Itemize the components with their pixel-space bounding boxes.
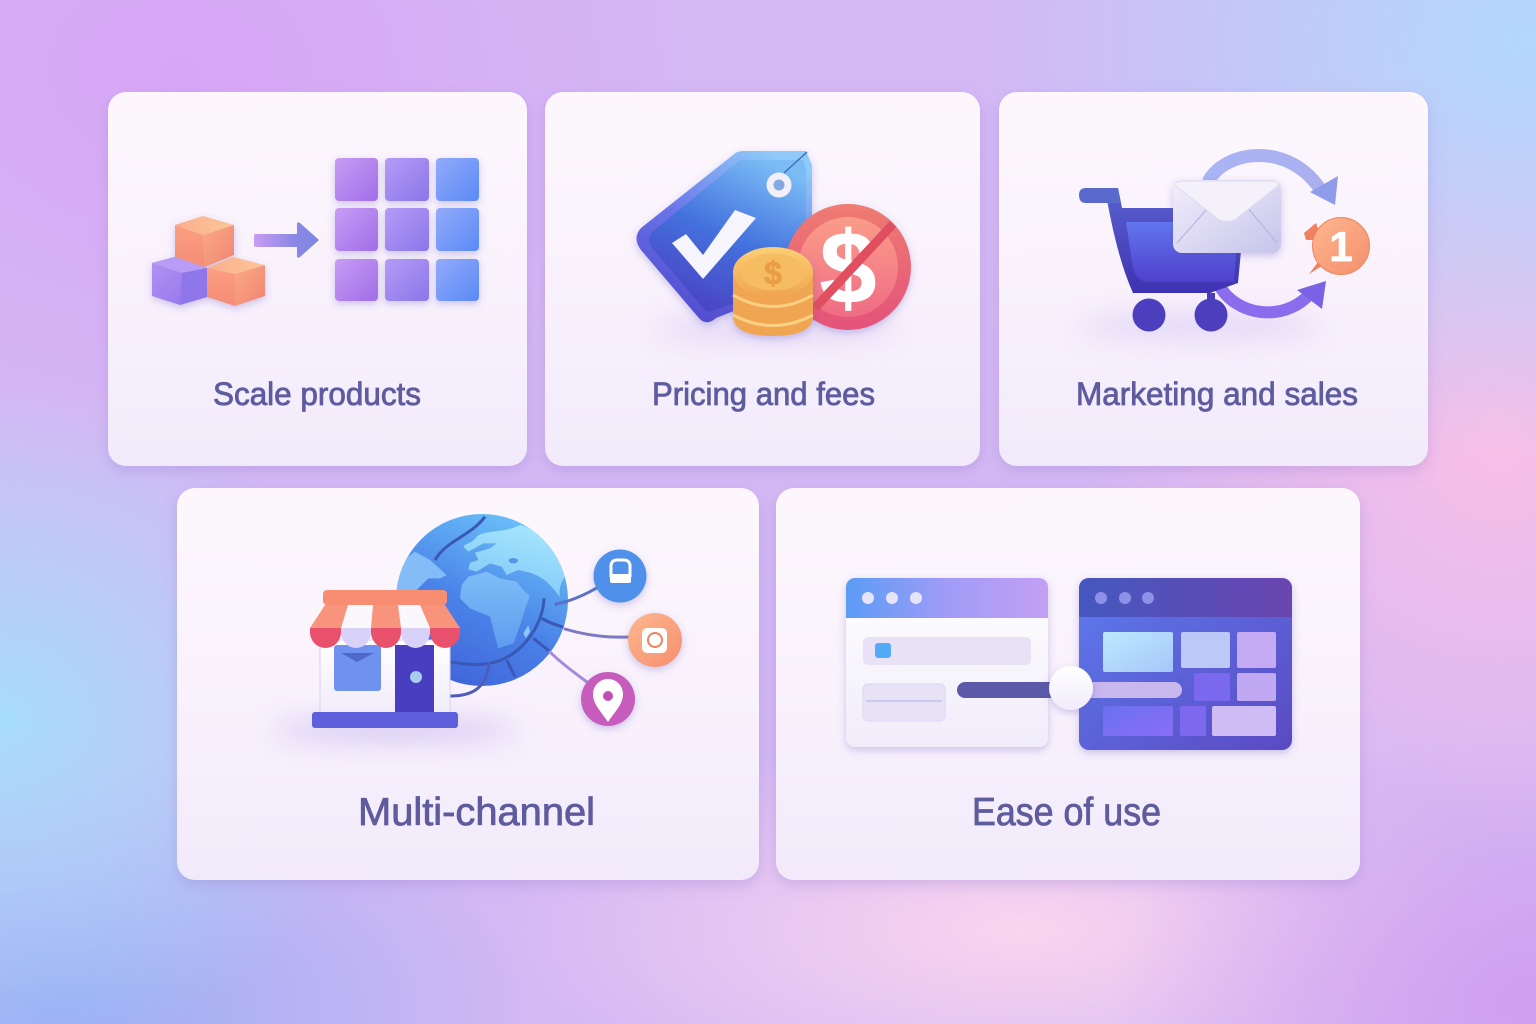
panel: Scale products bbox=[108, 92, 527, 466]
icon: envelope bbox=[1173, 180, 1281, 253]
arrow: top arc bbox=[1208, 156, 1338, 205]
icon: cubes bbox=[152, 216, 265, 306]
icon: notification badge bbox=[1304, 218, 1370, 274]
icon: storefront bbox=[310, 590, 460, 728]
icon: price tag bbox=[636, 151, 812, 322]
icon: crossed-out dollar: $ bbox=[820, 211, 876, 325]
icon: lock channel bbox=[594, 550, 646, 602]
icon: globe bbox=[390, 514, 570, 686]
panel: Ease of use bbox=[776, 488, 1360, 880]
label: Multi-channel bbox=[358, 791, 595, 834]
panel: Multi-channel bbox=[177, 488, 759, 880]
arrow: scale bbox=[254, 222, 319, 258]
panel: Pricing and fees bbox=[545, 92, 980, 466]
icon: complex window bbox=[1079, 578, 1292, 750]
icon: coin stack bbox=[733, 247, 813, 336]
icon: product grid bbox=[335, 158, 479, 301]
icon: shopping cart bbox=[1079, 188, 1245, 332]
icon: crossed-out dollar bbox=[785, 204, 911, 330]
icon: coin stack: $ bbox=[764, 255, 782, 291]
connector lines bbox=[450, 586, 630, 696]
label: Marketing and sales bbox=[1076, 376, 1358, 412]
icon: simple window bbox=[846, 578, 1048, 747]
arrow: bottom arc bbox=[1219, 281, 1326, 312]
label: Scale products bbox=[213, 376, 421, 412]
icon: slider bbox=[957, 666, 1182, 710]
icon: refresh channel bbox=[628, 613, 682, 667]
panel: Marketing and sales bbox=[999, 92, 1428, 466]
label: Pricing and fees bbox=[652, 376, 875, 412]
icon: location pin bbox=[581, 672, 635, 726]
icon: notification badge: 1 bbox=[1329, 223, 1353, 270]
label: Ease of use bbox=[972, 791, 1161, 834]
